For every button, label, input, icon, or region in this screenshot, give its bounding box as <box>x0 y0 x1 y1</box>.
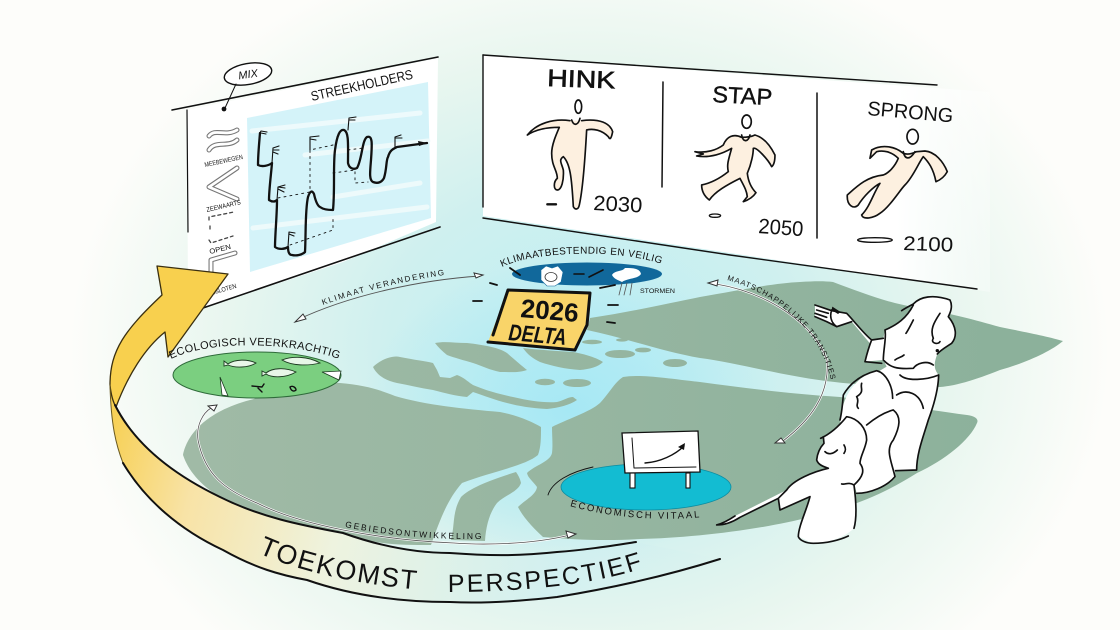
circle: klimaatbestendig en veilig <box>472 246 675 324</box>
circle: ecologisch veerkrachtig <box>168 338 342 398</box>
strategy labels: GESLOTEN <box>207 283 238 298</box>
panel: strategy wall <box>172 57 440 308</box>
strategy icons <box>209 130 237 276</box>
heading: perspectief: PERSPECTIEF <box>450 552 640 592</box>
island C <box>523 348 603 370</box>
heading: toekomst: TOEKOMST <box>264 536 418 589</box>
green ellipse <box>173 352 341 398</box>
panel outline <box>172 57 440 308</box>
year: 2050: 2050 <box>758 215 804 241</box>
icon: double arrow <box>574 270 603 277</box>
small islands <box>535 338 687 387</box>
figure: stap <box>695 115 775 217</box>
water glow <box>360 260 780 560</box>
island B <box>373 357 577 409</box>
label: KLIMAATBESTENDIG EN VEILIG <box>500 246 662 267</box>
dividers <box>662 82 817 238</box>
land: upper right <box>587 281 1063 387</box>
strategy labels: OPEN <box>209 244 232 256</box>
island A <box>435 342 527 372</box>
sketch marks <box>473 268 618 323</box>
person: man <box>815 297 955 471</box>
circle: economisch vitaal <box>548 430 732 519</box>
icon: rain <box>619 283 632 295</box>
heading: streekholders: STREEKHOLDERS <box>309 67 414 104</box>
year: 2100: 2100 <box>903 233 954 257</box>
panel: hink stap sprong <box>483 55 990 292</box>
panel surface <box>187 58 438 308</box>
strategy labels: MEEBEWEGEN <box>204 154 244 169</box>
sign: 2026 delta: DELTA <box>508 319 568 350</box>
small creatures <box>252 384 296 392</box>
panel outline <box>483 55 977 289</box>
billboard growth chart <box>632 438 696 468</box>
people watching <box>717 297 955 543</box>
circular arrow: gebiedsontwikkeling: GEBIEDSONTWIKKELING <box>346 522 481 539</box>
land: left bank <box>183 383 541 545</box>
person: child <box>717 417 867 543</box>
dotted links <box>278 145 368 245</box>
delta map <box>183 281 1063 545</box>
stakeholder route <box>258 130 427 255</box>
mix callout <box>222 59 273 111</box>
circular arrow: klimaat verandering <box>293 270 484 323</box>
strategy labels: ZEEWAARTS <box>206 199 242 214</box>
label: stormen: STORMEN <box>640 288 675 295</box>
blue ellipse <box>512 262 662 286</box>
sign: 2026 delta <box>488 290 590 350</box>
heading: sprong: SPRONG <box>867 98 954 127</box>
chart stripes <box>252 113 428 228</box>
shoreline wedges <box>220 371 341 396</box>
icon: sun <box>541 266 563 286</box>
yellow arc band <box>110 385 720 603</box>
panel surface <box>483 55 990 292</box>
heading: hink: HINK <box>547 65 616 94</box>
chart area <box>247 82 431 272</box>
fish <box>224 357 320 377</box>
sign: 2026 delta: 2026 <box>519 293 580 328</box>
figure: sprong <box>847 129 947 242</box>
figure: hink <box>527 100 613 209</box>
arc outlines <box>110 385 720 603</box>
heading: stap: STAP <box>712 81 773 110</box>
route flags <box>260 117 402 247</box>
teal ellipse <box>561 464 731 510</box>
billboard legs <box>630 473 690 488</box>
arrow: toekomst arrowhead <box>110 266 228 407</box>
label: ECONOMISCH VITAAL <box>570 500 700 519</box>
route arrow head <box>418 141 428 146</box>
circular arrow: maatschappelijke transities <box>706 275 836 444</box>
strategy labels <box>204 154 244 298</box>
circular arrow: maatschappelijke transities: MAATSCHAPPELIJKE TRANSITIES <box>728 275 836 379</box>
billboard <box>622 431 700 473</box>
land: middle island <box>451 472 521 541</box>
sweep line <box>548 467 593 495</box>
person: middle figure <box>840 371 899 493</box>
icon: storm cloud <box>612 268 641 282</box>
mix callout: MIX <box>238 68 259 82</box>
chart arrow head <box>678 443 685 450</box>
label: ECOLOGISCH VEERKRACHTIG <box>168 338 340 359</box>
land: right bank <box>518 376 978 540</box>
year: 2030: 2030 <box>593 192 643 218</box>
circular arrow: gebiedsontwikkeling <box>196 404 578 546</box>
circular arrow: klimaat verandering: KLIMAAT VERANDERING <box>322 270 444 305</box>
